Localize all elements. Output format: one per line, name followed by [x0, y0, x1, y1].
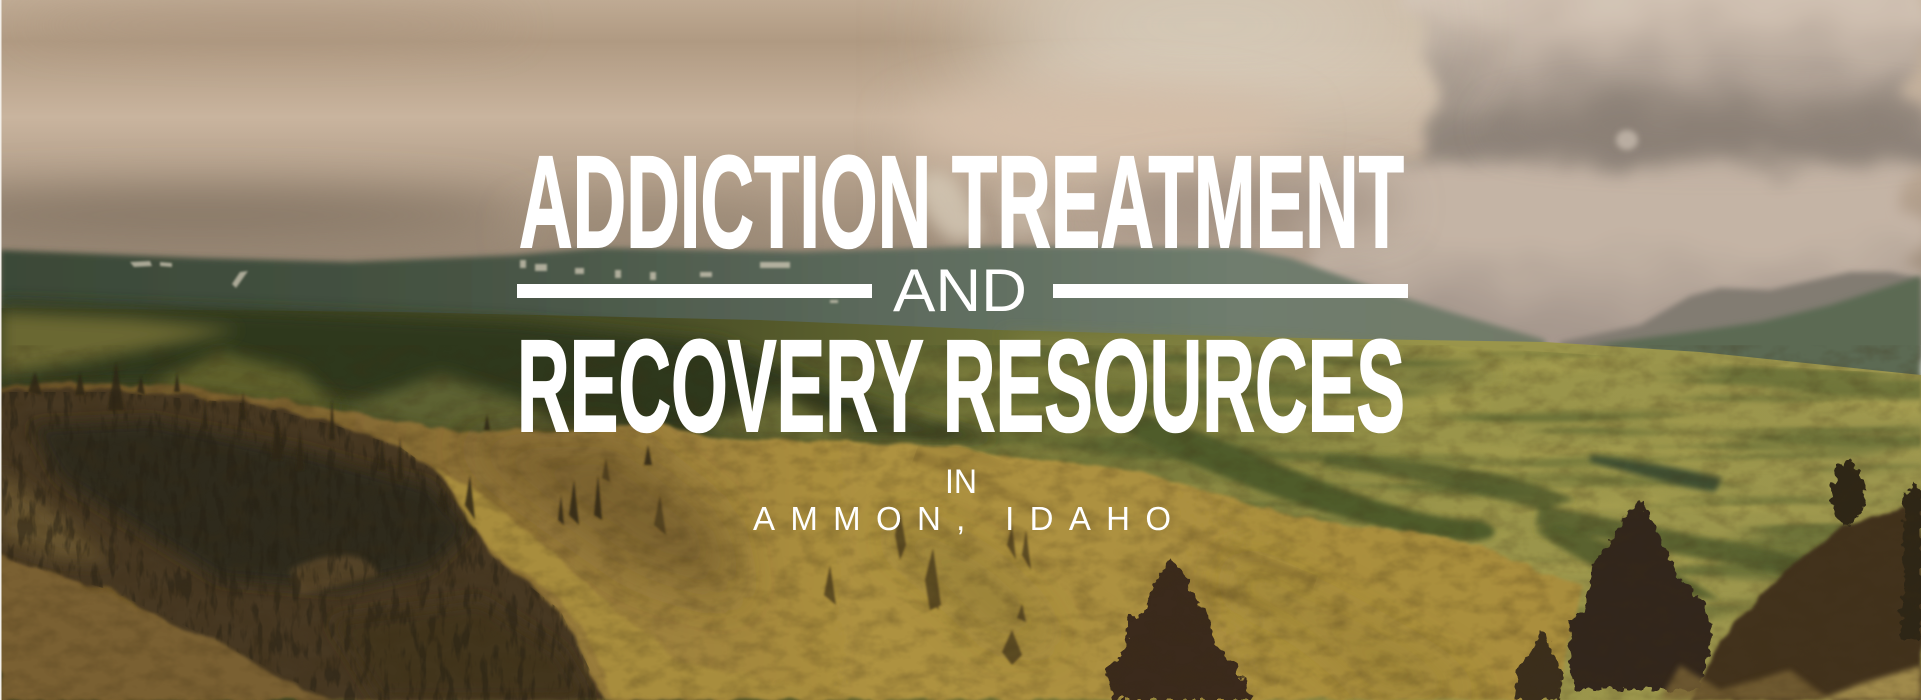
dark tree at right edge	[1900, 480, 1921, 640]
word and: AND	[893, 257, 1027, 324]
golden hill shading	[460, 440, 1480, 700]
bottom left hill	[0, 558, 330, 700]
tree: center bottom	[1106, 558, 1252, 700]
tree: large right	[1568, 500, 1714, 690]
golden ridge strip	[435, 467, 850, 698]
dry grass bottom right corner	[1820, 666, 1921, 700]
pine texture on hillside	[0, 385, 610, 700]
left edge line	[0, 0, 2, 700]
title block	[517, 128, 1408, 537]
valley tree bands	[1120, 415, 1815, 600]
dark forested hillside left	[0, 390, 605, 700]
tree: small lower right	[1514, 628, 1562, 700]
dark mountain band	[0, 246, 1545, 360]
valley floor	[0, 308, 1921, 700]
texture overlay	[0, 345, 1921, 700]
location: AMMON, IDAHO	[753, 500, 1171, 537]
small conifers on ridge	[28, 362, 652, 525]
right divider bar	[1053, 284, 1408, 298]
far mountains	[1560, 272, 1921, 400]
forest belt in the mid distance	[0, 302, 1500, 445]
dry grass foreground	[1660, 665, 1830, 700]
sky and clouds	[0, 0, 1921, 345]
golden hill streaks	[906, 447, 1316, 683]
word in: IN	[945, 463, 977, 501]
snow patches on mountain	[130, 260, 838, 303]
brown slope on the right	[1690, 493, 1921, 700]
valley streak texture	[835, 345, 1921, 621]
scattered pines on golden hill	[602, 458, 1031, 665]
golden foreground hills	[0, 384, 1585, 700]
tree: far right	[1830, 458, 1866, 528]
left divider bar	[517, 284, 872, 298]
